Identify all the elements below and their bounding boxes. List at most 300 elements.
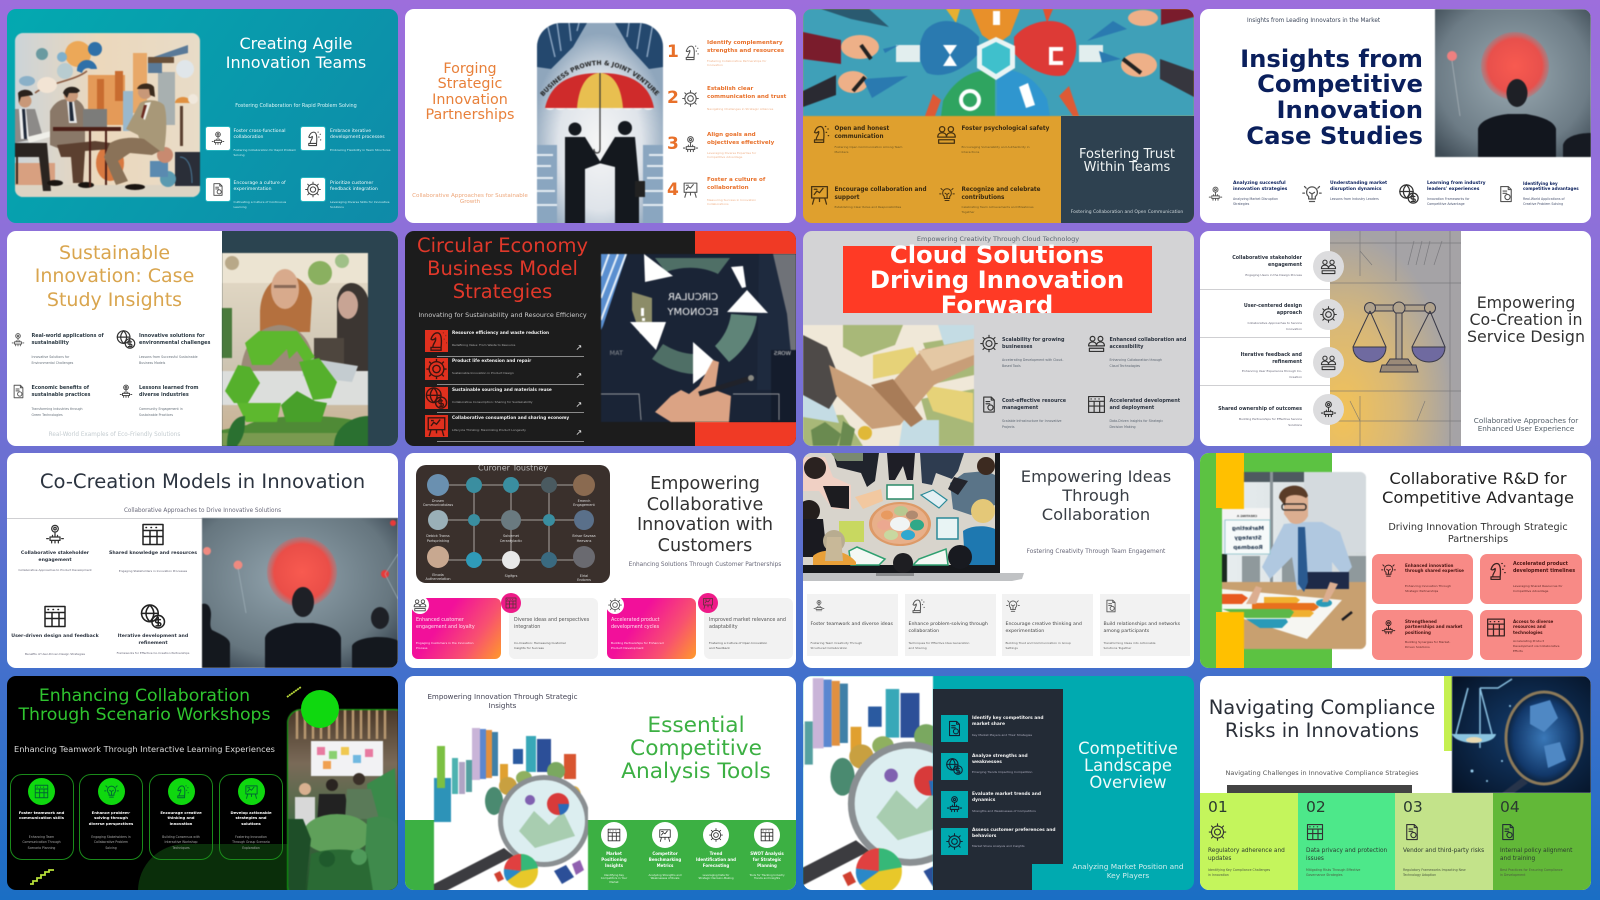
tool 2: Competitor — [652, 850, 678, 856]
subtitle: Enhancing Solutions Through Customer Partnerships — [629, 562, 781, 568]
text: celebrate contributions — [962, 186, 1040, 214]
card 4: adaptability — [709, 625, 738, 630]
list item 4: Foster a culture of — [707, 176, 765, 182]
icon 3 — [1313, 346, 1344, 378]
text: environmental solutions — [139, 332, 210, 365]
list item 4: Building Partnerships for Effective Service — [1239, 416, 1302, 420]
card 2: Competitive Advantage — [1513, 589, 1548, 593]
image: customer journey diagram — [416, 465, 610, 583]
card 2: integration — [514, 625, 540, 630]
tool 4: Tools for Tracking Industry — [749, 872, 785, 876]
card 3: partnerships and market — [1405, 624, 1462, 629]
text: real-world applications: Innovative Solutions for — [32, 354, 69, 358]
subtitle: Insights — [489, 701, 516, 710]
title: Through Scenario Workshops — [18, 705, 271, 725]
text: industry leaders: Competitive Advantage — [1427, 202, 1465, 206]
text: celebrate contributions: Celebrating Team Achievements and Milestones — [962, 205, 1034, 209]
text: cost-effective: management — [1002, 404, 1038, 410]
item 3: Strengths and Weaknesses of Competitors — [972, 809, 1036, 813]
text: economic benefits: Economic benefits of — [32, 384, 89, 390]
column 04: Best Practices for Ensuring Compliance — [1500, 868, 1563, 872]
card 1: Foster teamwork and — [19, 810, 64, 814]
title: Through — [1062, 486, 1130, 505]
card 3: Encourage creative — [160, 810, 202, 814]
tool 1 — [589, 822, 639, 888]
subtitle: Fostering Collaboration and Open Communication — [1071, 210, 1183, 214]
panel: Co-Creation Models in Innovation — [7, 453, 398, 668]
icon: experimentation — [205, 176, 231, 202]
tool 1: Competitors in Your — [601, 876, 627, 880]
item: shared knowledge: Engaging Stakeholders in Innovation Processes — [119, 569, 187, 573]
tool 2: Metrics — [657, 862, 673, 868]
column 04: in Development — [1500, 873, 1525, 877]
text: lessons learned: diverse industries — [139, 392, 189, 398]
lime stripe — [1444, 676, 1452, 750]
image: circular economy diagram on suit: TAM — [609, 349, 624, 357]
title — [1240, 44, 1423, 150]
text: customer feedback: Leveraging Diverse Skills for Innovative — [330, 200, 390, 204]
title: Circular Economy — [417, 234, 588, 257]
text: environmental solutions: Business Models — [139, 361, 165, 365]
subtitle: Navigating Challenges in Innovative Compliance Strategies — [1226, 768, 1418, 776]
image: balance scale blueprint — [1330, 231, 1461, 446]
card 1: Enhanced customer — [416, 618, 464, 623]
card 3: Accelerated product — [611, 618, 659, 623]
card 3 — [1002, 594, 1092, 656]
text: open communication — [834, 125, 902, 154]
card 1: Fostering Team Creativity Through — [810, 641, 862, 645]
title: Cloud Solutions — [890, 240, 1104, 268]
icon: strategy knight — [814, 126, 830, 143]
title: Empowering — [650, 474, 760, 494]
icon 1 — [1313, 250, 1344, 282]
list item 2: communication and trust — [707, 94, 786, 100]
text: deployment: Accelerated development — [1110, 398, 1180, 404]
icon: deployment — [1086, 395, 1106, 414]
right block — [222, 231, 398, 446]
item 4: Assess customer preferences and — [972, 828, 1055, 833]
title: Empowering Ideas — [1021, 467, 1171, 486]
card 2 — [1480, 554, 1582, 604]
icon: card 4 badge — [698, 593, 718, 613]
image: customer journey diagram: Elrial — [580, 574, 588, 578]
tool 1: Market — [606, 850, 622, 856]
tool 2 — [640, 822, 690, 888]
text: competitive advantages: Identifying key — [1523, 180, 1558, 186]
image: customer journey diagram: Portsprinking — [427, 539, 449, 543]
zigzag bottom — [29, 868, 56, 886]
title: Service Design — [1467, 327, 1585, 346]
text: open communication: communication — [834, 134, 884, 140]
tint shape — [138, 844, 398, 890]
list item 4: Measuring Success in Innovation — [707, 198, 756, 202]
card 2: Collaborative Problem — [94, 840, 128, 844]
title — [842, 242, 1152, 318]
list item 4 — [1202, 406, 1302, 430]
subtitle — [405, 693, 600, 710]
image: man facing a red glowing sphere — [202, 518, 398, 668]
title: Analysis Tools — [621, 759, 771, 784]
tool 3: Identification and — [696, 856, 736, 862]
text: psychological safety: Interactions — [962, 150, 979, 154]
card 3: experimentation — [1006, 628, 1044, 634]
card 2: solving through — [94, 815, 128, 820]
text: collaboration support — [834, 186, 927, 209]
card 3: Settings — [1006, 646, 1018, 650]
title: Forward — [941, 290, 1053, 319]
tool 3: Strategic Decision-Making — [698, 876, 734, 880]
card 3: positioning — [1405, 630, 1431, 635]
text: scalability: Based Tools — [1002, 364, 1021, 368]
panel: Cloud Solutions Driving Innovation Forward — [802, 231, 1194, 446]
card 4: Improved market relevance and — [709, 618, 786, 623]
text: environmental solutions: environmental challenges — [139, 340, 210, 346]
image: circular economy diagram on suit — [601, 254, 796, 422]
title: Collaborative — [647, 495, 763, 515]
text: real-world applications: Real-world applications of — [32, 332, 104, 338]
item: user-driven design: User-driven design and feedback — [11, 634, 99, 639]
text: real-world applications: Environmental Challenges — [32, 361, 73, 365]
text: celebrate contributions: contributions — [962, 195, 1004, 201]
text: analyzing strategies — [1233, 180, 1288, 206]
image: charts and magnifier — [434, 676, 588, 890]
tool 1: Market — [609, 880, 619, 884]
icon: competitive — [1500, 186, 1512, 202]
icon: analyzing — [1208, 186, 1222, 201]
title: Customers — [658, 536, 752, 556]
title: Landscape — [1084, 756, 1172, 775]
item 3 — [940, 790, 1060, 818]
list item 1: Innovation — [707, 63, 723, 67]
text: collaboration — [1110, 336, 1186, 372]
card 3: Building Synergies for Market- — [1405, 640, 1450, 644]
text: analyzing strategies: innovation strategies — [1233, 187, 1287, 192]
card 2: collaboration — [908, 628, 939, 634]
text: collaboration support: Establishing Clear Roles and Responsibilities — [834, 205, 901, 209]
icon: card 2 badge — [501, 593, 521, 613]
list item 1: strengths and resources — [707, 48, 784, 54]
list item 1: ↗ — [576, 343, 582, 352]
text: cross-functional: Solving — [234, 153, 244, 157]
text: deployment — [1110, 398, 1180, 434]
text: cross-functional: Fostering Collaboration for Rapid Problem — [234, 148, 296, 152]
card 2: Techniques for Effective Idea Generation — [908, 641, 969, 645]
text: market disruption: disruption dynamics — [1330, 187, 1382, 192]
column 03 — [1395, 792, 1493, 890]
icon: bulb — [1302, 186, 1322, 202]
card 4: Fostering Innovation — [235, 834, 267, 838]
list item 2: ↗ — [576, 371, 582, 380]
title: Business Model — [427, 257, 578, 280]
card 3: development cycles — [611, 625, 659, 630]
item 1: Identify key competitors and — [972, 716, 1044, 721]
card 1: Foster teamwork and diverse ideas — [810, 622, 893, 627]
item: iterative development: Iterative development and — [118, 634, 188, 639]
icon: globe — [116, 330, 136, 349]
list item 4: Collaborative consumption and sharing economy — [452, 416, 569, 421]
text: environmental solutions: Innovative solutions for — [139, 332, 205, 338]
list item 1: Fostering Collaborative Partnerships for — [707, 58, 766, 62]
icon: cost — [980, 395, 998, 414]
text: cost-effective: Projects — [1002, 425, 1015, 429]
card 3: Building Consensus with — [162, 834, 200, 838]
text: cost-effective: Scalable Infrastructure for Innovative — [1002, 419, 1061, 423]
item 1: market share — [972, 722, 1005, 727]
text: iterative — [330, 128, 390, 152]
icon: cross-functional — [205, 126, 231, 150]
card 3 — [607, 598, 696, 659]
list item 3: Collaborative Consumption: Sharing for Sustainability — [452, 400, 533, 404]
card 4: Through Group Scenario — [232, 840, 270, 844]
image: man working on strategy roadmap — [1222, 472, 1366, 649]
icon: scalability — [980, 334, 998, 353]
card 4: and Feedback — [709, 646, 730, 650]
item: iterative development: refinement — [138, 641, 168, 646]
card 3 — [1372, 610, 1473, 660]
column 01 — [1200, 792, 1298, 890]
title: Overview — [1089, 773, 1167, 792]
dark panel extension — [932, 864, 1032, 890]
image: recycling symbol in office — [221, 252, 369, 446]
text: deployment: Data-Driven Insights for Strategic — [1110, 419, 1163, 423]
title: Navigating Compliance — [1209, 696, 1435, 718]
icon: people network — [937, 126, 956, 144]
title: Innovation — [432, 92, 508, 108]
title: Essential — [647, 712, 745, 738]
column 01: updates — [1208, 856, 1231, 862]
icon 4 — [1313, 394, 1344, 424]
card 2 — [904, 594, 996, 656]
column 02: issues — [1306, 856, 1324, 862]
tool 4: Planning — [757, 862, 777, 868]
column 02: Governance Strategies — [1306, 873, 1343, 877]
text: cross-functional: collaboration — [234, 135, 263, 140]
subtitle: Driving Innovation Through Strategic — [1388, 522, 1568, 533]
text: lessons learned — [139, 384, 198, 422]
card 2: Enhance problem- — [92, 810, 130, 814]
column 03: Regulatory Frameworks Impacting New — [1403, 868, 1466, 872]
image: workshop team around table — [287, 708, 398, 890]
text: analyzing strategies: Strategies — [1233, 202, 1249, 206]
card 4: Development via Collaborative — [1513, 644, 1559, 648]
card 3: innovation — [170, 821, 192, 826]
text: analyzing strategies: Analyzing successful — [1233, 180, 1286, 186]
image: man working on strategy roadmap: Marketing — [1232, 526, 1264, 532]
image: man working on strategy roadmap: Strategy — [1234, 536, 1262, 542]
card 4: strategies and — [235, 815, 267, 820]
list item 3 — [424, 387, 584, 413]
list item 4: Solutions — [1288, 422, 1302, 426]
text: customer feedback: feedback integration — [330, 187, 378, 192]
title: Co-Creation Models in Innovation — [40, 470, 365, 493]
icon: presentation board — [810, 186, 828, 205]
column 02 — [1298, 792, 1395, 890]
item: user-driven design — [9, 604, 101, 660]
text: competitive advantages — [1523, 180, 1579, 206]
list item 4 — [424, 415, 584, 442]
card 3: Encourage creative thinking and — [1006, 622, 1082, 627]
text: lessons learned: Community Engagement in — [139, 406, 183, 410]
subtitle: Fostering Creativity Through Team Engagement — [1027, 549, 1165, 555]
image: customer journey diagram: Solvemet — [503, 534, 520, 538]
card 4: Solutions Together — [1104, 646, 1131, 650]
subtitle — [412, 192, 528, 205]
list item 1 — [1202, 254, 1302, 280]
text: collaboration: Cloud Technologies — [1110, 364, 1140, 368]
panel: Empowering Ideas Through Collaboration — [802, 453, 1194, 668]
image: customer journey diagram: Brisar Savasa — [572, 534, 596, 538]
dark bar — [1227, 784, 1412, 792]
column 02: 02 — [1306, 798, 1326, 816]
list item 2 — [1202, 302, 1302, 332]
green circle — [301, 690, 339, 728]
text: customer feedback: Solutions — [330, 205, 344, 209]
card 2: Engaging Stakeholders in — [91, 834, 131, 838]
card 4: among participants — [1104, 628, 1149, 634]
accent block bottom — [695, 422, 796, 446]
text: experimentation: experimentation — [234, 187, 272, 192]
title — [405, 234, 600, 303]
title: Innovation Teams — [226, 52, 366, 72]
list item 4: ↗ — [576, 428, 582, 437]
item: shared knowledge: Shared knowledge and resources — [109, 551, 197, 556]
card 1 — [412, 598, 501, 659]
text: cross-functional — [234, 128, 296, 157]
panel: Sustainable Innovation Case Study Insights — [7, 231, 398, 446]
item 3: dynamics — [972, 798, 995, 803]
title: Innovation with — [637, 515, 773, 535]
text: competitive advantages: Creative Problem Solving — [1523, 202, 1563, 206]
card 4 — [1100, 594, 1190, 656]
text: experimentation: Learning — [234, 205, 247, 209]
title: Enhancing Collaboration — [39, 686, 250, 706]
subtitle: Analyzing Market Position and — [1072, 862, 1184, 871]
card 1: Engaging Customers in the Innovation — [416, 641, 474, 645]
panel: Fostering Trust Within Teams — [802, 8, 1194, 223]
column 02: Data privacy and protection — [1306, 848, 1387, 854]
subtitle — [1062, 863, 1194, 880]
icon: customer feedback — [300, 176, 326, 202]
image: customer journey diagram: Endorns — [577, 578, 591, 582]
title — [1200, 696, 1444, 742]
text: economic benefits — [32, 384, 90, 422]
title: Competitive — [1257, 69, 1423, 98]
list item 2: Product life extension and repair — [452, 359, 531, 364]
card 2: Co-Creation: Harnessing Customer — [514, 641, 566, 645]
text: environmental solutions: Lessons from Successful Sustainable — [139, 354, 198, 358]
panel: Enhancing Collaboration Through Scenario Workshops — [7, 676, 398, 890]
card 2 — [79, 774, 143, 860]
subtitle: Innovating for Sustainability and Resource Efficiency — [418, 311, 587, 319]
text: customer feedback — [330, 180, 390, 209]
title: Fostering Trust — [1079, 146, 1175, 162]
text: industry leaders: Learning from industry — [1427, 180, 1486, 186]
subtitle: Empowering Innovation Through Strategic — [427, 692, 578, 701]
title: Competitive Advantage — [1382, 488, 1574, 507]
item 2: Emerging Trends Impacting Competition — [972, 770, 1032, 774]
card 1 — [10, 774, 74, 860]
image: man facing a red glowing sphere — [1434, 9, 1591, 158]
column 04: Internal policy alignment — [1500, 848, 1572, 854]
item: iterative development — [107, 604, 199, 660]
panel: Empowering Co-Creation in Service Design — [1200, 231, 1591, 446]
column 01: Identifying Key Compliance Challenges — [1208, 868, 1270, 872]
icon: node — [12, 333, 24, 346]
card 1: Communication Through — [22, 840, 61, 844]
card 2: Diverse ideas and perspectives — [514, 618, 589, 623]
subtitle — [1461, 417, 1591, 434]
text: collaboration support: Encourage collaboration and — [834, 186, 927, 192]
icon: iterative — [300, 126, 326, 150]
subtitle: Collaborative Approaches for — [1474, 416, 1578, 425]
image: customer journey diagram: Sigifgrs — [505, 574, 518, 578]
card 3: Building Partnerships for Enhanced — [611, 641, 664, 645]
text: market disruption: Lessons from Industry Leaders — [1330, 197, 1379, 201]
title: Insights from — [1240, 44, 1423, 72]
image: man working on strategy roadmap: Roadmap — [1233, 545, 1263, 551]
text: experimentation: Encourage a culture of — [234, 180, 286, 186]
column 01: in Innovation — [1208, 873, 1229, 877]
list item 3: Sustainable sourcing and materials reuse — [452, 388, 552, 393]
subtitle: Collaborative Approaches to Drive Innovative Solutions — [124, 508, 281, 514]
title — [35, 242, 194, 311]
icon: card 1 badge — [411, 596, 429, 614]
text: real-world applications: sustainability — [32, 340, 69, 346]
image: customer journey diagram: Elnoda — [432, 573, 444, 577]
image: customer journey diagram: Drusen — [432, 499, 444, 503]
icon: collaboration cloud — [1086, 334, 1106, 353]
list item 2: Collaborative Approaches to Service — [1248, 320, 1302, 324]
image: hands assembling trust shield — [803, 9, 1194, 117]
text: customer feedback: Prioritize customer — [330, 180, 373, 186]
subtitle: Partnerships — [1448, 534, 1508, 545]
panel: Essential Competitive Analysis Tools — [405, 676, 796, 890]
title: Co-Creation in — [1470, 310, 1582, 329]
item 1: Key Market Players and Their Strategies — [972, 733, 1032, 737]
text: lessons learned: Lessons learned from — [139, 384, 198, 390]
subtitle: Enhanced User Experience — [1478, 424, 1574, 433]
list item 1: engagement — [1268, 262, 1302, 268]
card 1: Process — [416, 646, 427, 650]
icon: pin — [119, 382, 133, 401]
image: circular economy diagram on suit: ECONOMY — [666, 307, 719, 318]
text: experimentation: Cultivating a Culture of Continuous — [234, 200, 286, 204]
card 3: Strengthened — [1405, 619, 1437, 624]
list item 3: refinement — [1272, 360, 1302, 364]
column 01: Regulatory adherence and — [1208, 848, 1285, 854]
text: psychological safety: Encouraging Vulnerability and Authenticity in — [962, 145, 1029, 149]
text: scalability: businesses — [1002, 344, 1032, 350]
list item 1 — [424, 330, 584, 358]
text: cost-effective — [1002, 398, 1066, 434]
list item 4 — [667, 176, 766, 206]
item 2: Analyze strengths and — [972, 754, 1028, 759]
card 4 — [704, 598, 793, 659]
card 2 — [509, 598, 598, 659]
item 2 — [940, 752, 1060, 780]
subtitle: Empowering Creativity Through Cloud Technology — [917, 235, 1079, 243]
text: iterative: Embracing Flexibility in Team Structures — [330, 148, 390, 152]
text: iterative: development processes — [330, 135, 385, 140]
yellow stripe bottom — [1216, 612, 1244, 668]
item 4: behaviors — [972, 834, 996, 839]
panel: Circular Economy Business Model Strategies — [405, 231, 796, 446]
card 2: Insights for Success — [514, 646, 544, 650]
text: analyzing strategies: Analyzing Market Disruption — [1233, 197, 1278, 201]
image: scales and globe magnifier — [1452, 676, 1591, 792]
text: open communication: Open and honest — [834, 126, 889, 132]
list item 2: Sustainable Innovation in Product Design — [452, 371, 514, 375]
